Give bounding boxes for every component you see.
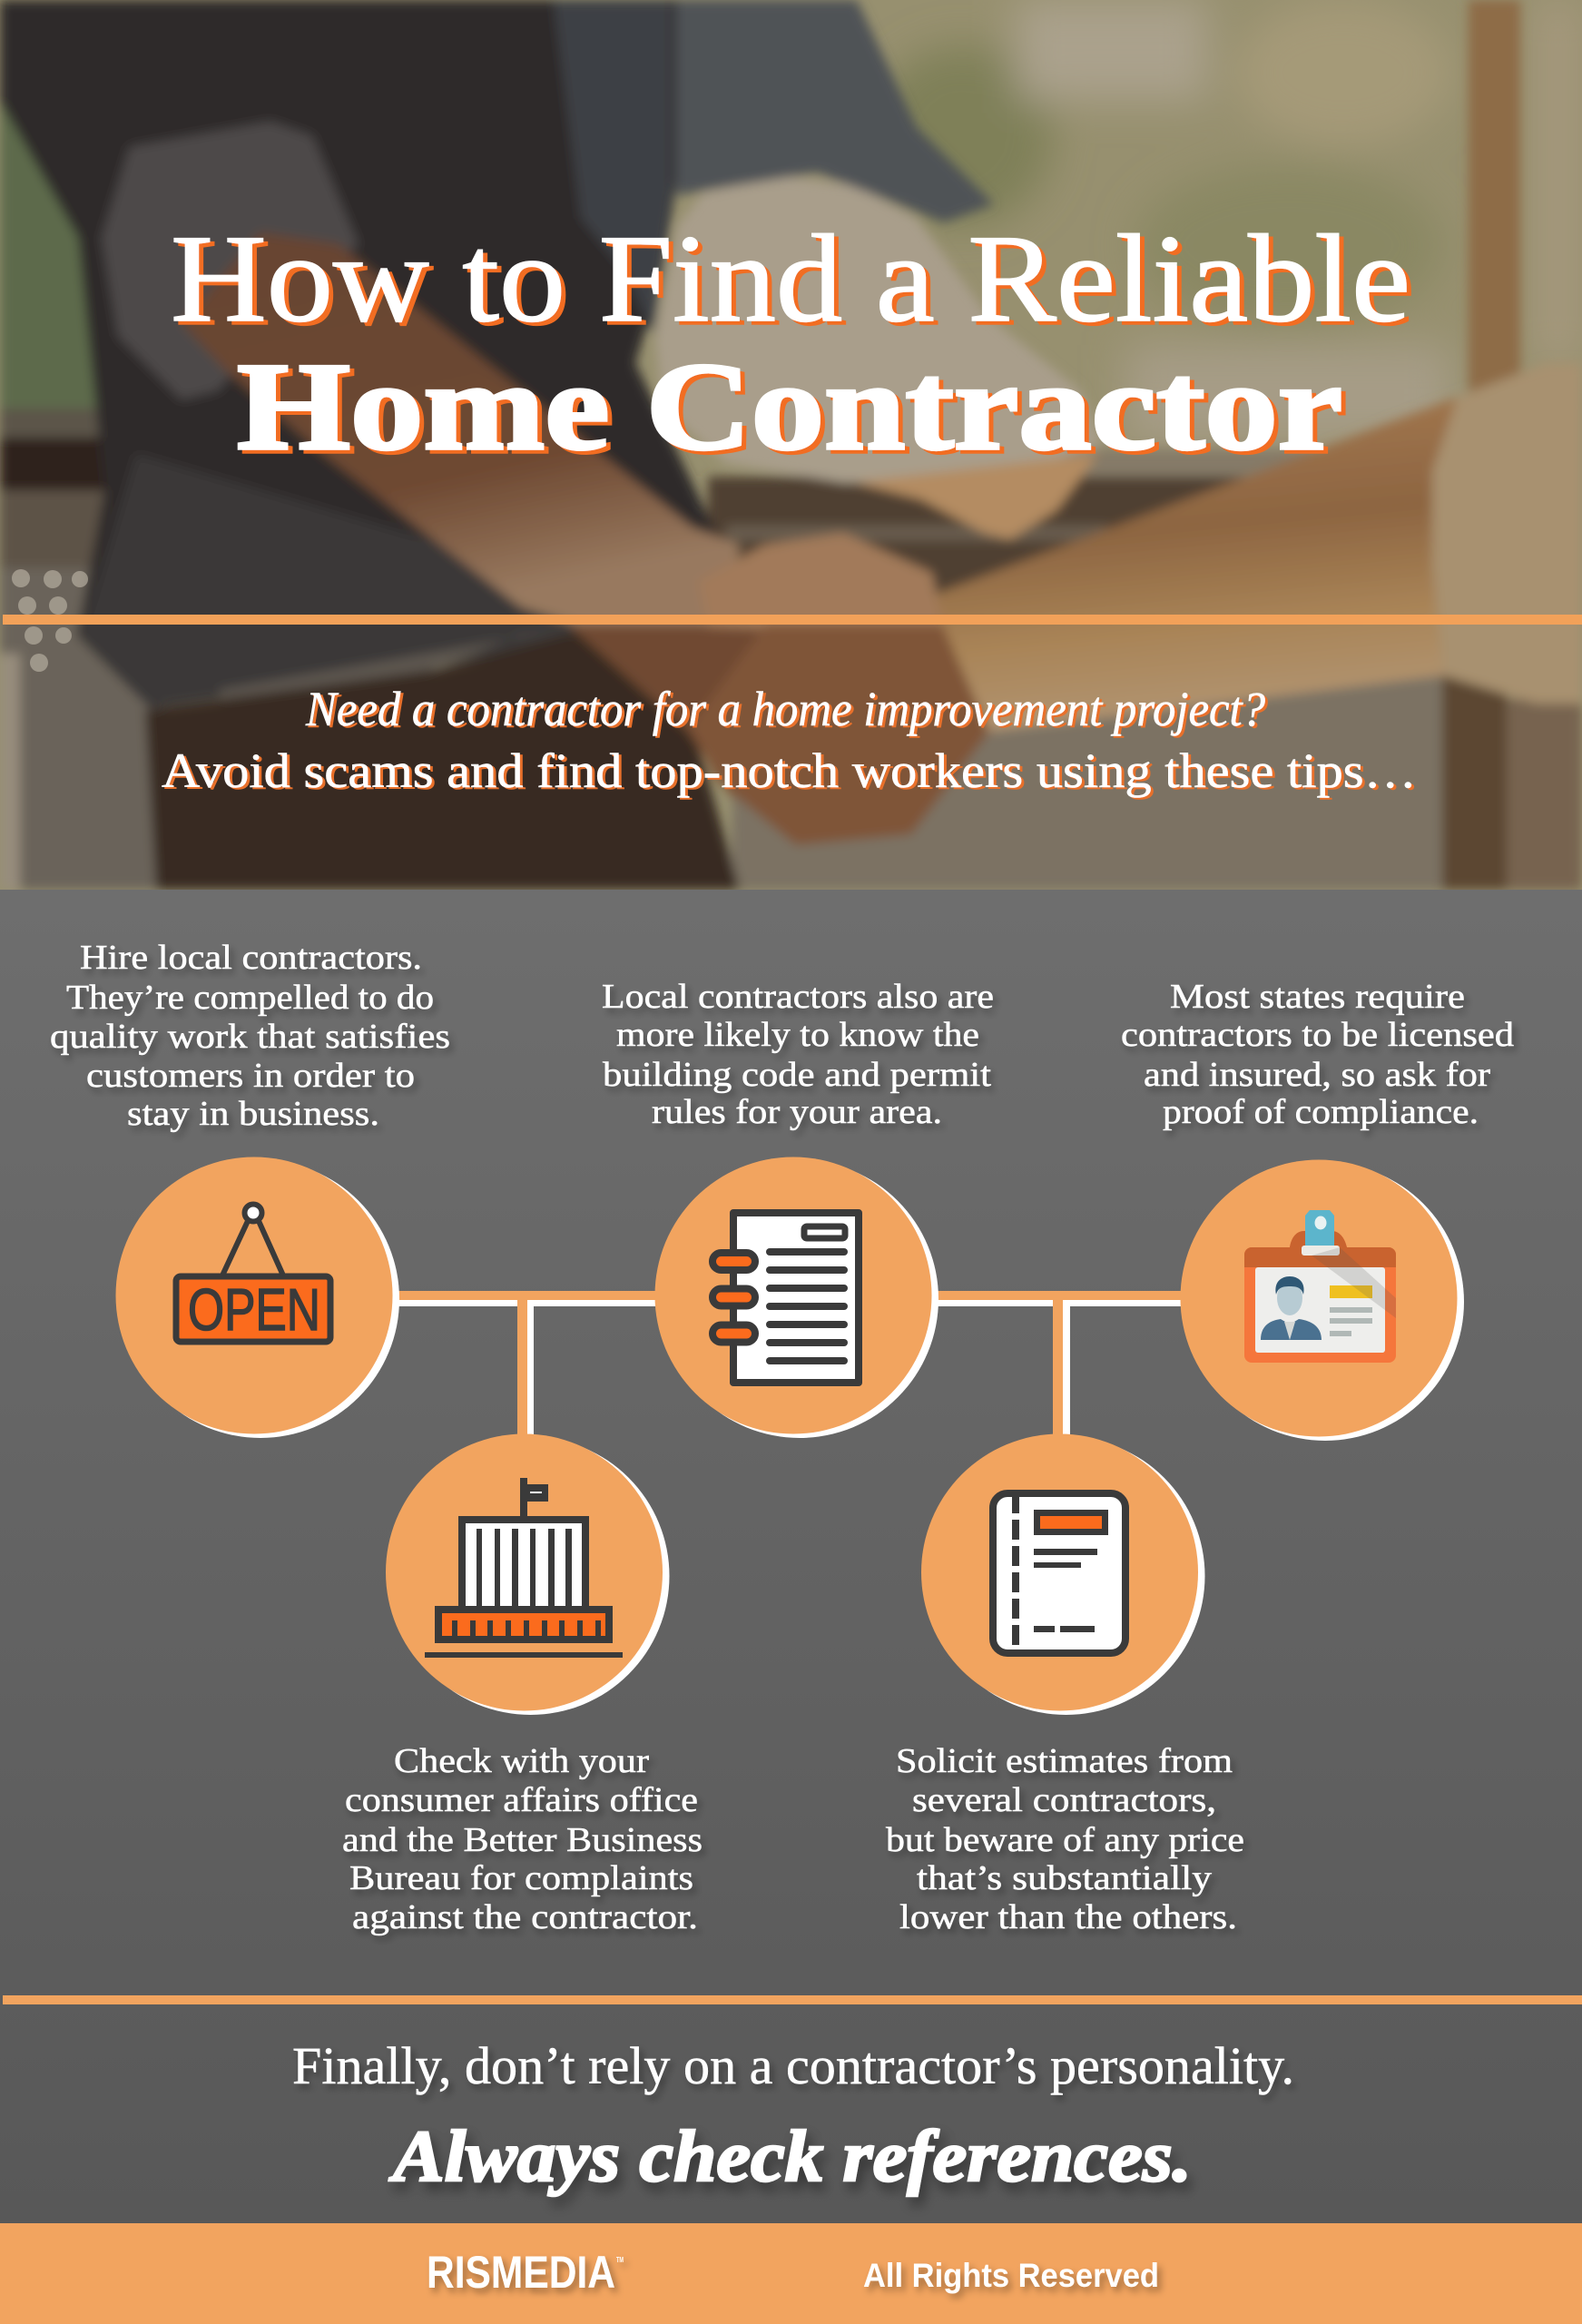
closing line: Finally, don’t rely on a contractor’s personality. [292,2036,1294,2095]
tip text: licensed: proof of compliance. [1163,1093,1479,1131]
tip text: estimates: several contractors, [912,1781,1216,1819]
tip text: consumer affairs: and the Better Business [342,1821,703,1859]
icon: id badge [1244,1210,1396,1363]
photo: window post upper [1469,0,1520,399]
photo: window sill on the right [708,449,1470,649]
photo: right arm [932,397,1458,732]
tip text: building code: rules for your area. [652,1093,942,1131]
intro text [162,682,1417,798]
tip text: hire local: Hire local contractors. [80,939,422,977]
circle: estimate book [921,1434,1205,1715]
bottom divider [3,1995,1582,2004]
tip text: hire local: customers in order to [86,1057,415,1095]
tip text: building code: Local contractors also are [602,978,994,1016]
icon: courthouse building [425,1478,623,1658]
photo: shirt hem [218,640,495,701]
tip text: estimates: but beware of any price [886,1821,1244,1859]
footer rights text: All Rights Reserved [863,2257,1159,2294]
tip text: consumer affairs: consumer affairs office [345,1781,698,1819]
circle: id badge [1180,1160,1464,1441]
photo: left window [0,0,163,890]
tip text: hire local [50,939,450,1133]
photo: post lower [1442,663,1582,890]
intro text: Avoid scams and find top-notch workers using these tips… [162,743,1417,798]
footer logo: TM [616,2256,624,2264]
intro text: Need a contractor for a home improvement project? [305,682,1265,736]
tip text: estimates: lower than the others. [899,1898,1237,1936]
photo: wrist [568,625,759,791]
tip text: building code: more likely to know the [616,1016,979,1054]
photo: handshake hand bottom [690,625,989,845]
circle: building [386,1434,670,1715]
photo: jeans [145,631,740,890]
gray content panel background [0,890,1582,2223]
tip text: estimates: Solicit estimates from [896,1742,1233,1780]
tip text: building code: building code and permit [603,1056,991,1094]
tip text: licensed: and insured, so ask for [1144,1056,1490,1094]
connector lines [390,1291,1189,1436]
top divider [3,615,1582,625]
footer logo: RISMEDIA [427,2247,615,2298]
closing callout: Always check references. [388,2117,1192,2197]
tip text: licensed: contractors to be licensed [1121,1016,1514,1054]
tip text: consumer affairs: Bureau for complaints [349,1859,693,1897]
photo: handshake hand top [699,533,944,635]
tip text: licensed [1121,978,1514,1131]
title: How to Find a Reliable [171,209,1410,348]
circle: open sign [116,1157,399,1438]
tip text: hire local: quality work that satisfies [50,1018,450,1056]
photo: shirt placket [554,0,672,336]
photo: far sleeve [676,0,994,222]
photo: garden and house background [871,0,1582,445]
tip text: licensed: Most states require [1170,978,1465,1016]
photo: forearm [182,232,740,626]
photo: right sleeve [1432,363,1582,704]
photo: lower room wall [731,654,1452,890]
tip text: hire local: They’re compelled to do [66,979,434,1017]
photo: hard hat [655,176,1103,483]
title: Home Contractor [237,337,1342,476]
hero photo: contractor handshake [0,0,1582,890]
footer bar [0,2223,1582,2324]
tip text: building code [602,978,994,1131]
photo: shirt torso [0,0,726,708]
photo: rolled sleeve [102,122,359,399]
photo: perforated panel dots [12,569,88,672]
icon: notepad [712,1213,859,1383]
icon: open sign: OPEN [188,1276,320,1343]
tip text: estimates [886,1742,1244,1936]
circle: notepad [655,1157,938,1438]
icon: estimate book [993,1493,1125,1653]
photo: hand under hat [853,454,1098,539]
tip text: consumer affairs [342,1742,703,1936]
tip text: consumer affairs: Check with your [394,1742,649,1780]
title [171,209,1410,476]
photo: shirt lower tone [82,454,581,708]
tip text: estimates: that’s substantially [917,1859,1212,1897]
tip text: hire local: stay in business. [127,1095,379,1133]
tip text: consumer affairs: against the contractor. [352,1898,698,1936]
icon: open sign [176,1204,330,1343]
